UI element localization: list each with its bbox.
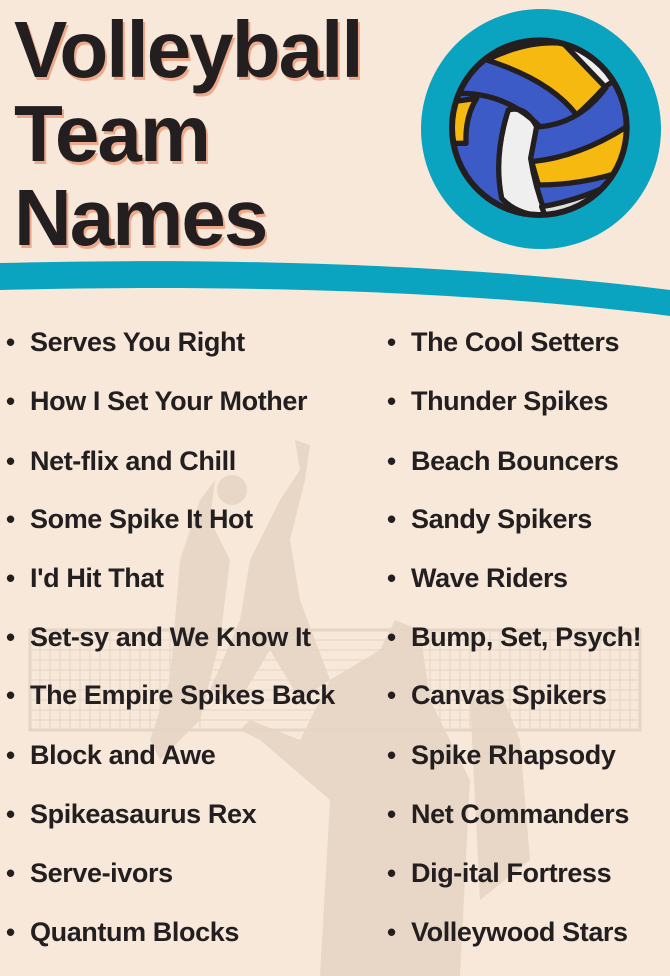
list: right column: Net Commanders	[411, 799, 629, 829]
list: right column: Canvas Spikers	[411, 680, 607, 710]
list: right column: Thunder Spikes	[411, 386, 608, 416]
list: left column: Net-flix and Chill	[30, 446, 236, 476]
list: right column: Bump, Set, Psych!	[411, 622, 641, 652]
list: left column: Serve-ivors	[30, 858, 173, 888]
list: right column: Volleywood Stars	[411, 917, 628, 947]
title: Names	[14, 173, 266, 262]
list: left column: How I Set Your Mother	[30, 386, 307, 416]
list: left column: Quantum Blocks	[30, 917, 239, 947]
list: right column	[388, 327, 641, 947]
title: Volleyball	[14, 5, 362, 94]
list: left column: Serves You Right	[30, 327, 245, 357]
title: Team	[14, 89, 209, 178]
wave band	[0, 261, 670, 316]
list: left column: Set-sy and We Know It	[30, 622, 311, 652]
list: left column	[6, 327, 336, 947]
list: left column: The Empire Spikes Back	[30, 680, 335, 710]
list: right column: The Cool Setters	[411, 327, 619, 357]
title	[14, 5, 362, 262]
list: left column: Spikeasaurus Rex	[30, 799, 256, 829]
list: right column: Sandy Spikers	[411, 504, 592, 534]
list: right column: Wave Riders	[411, 563, 568, 593]
list: right column: Beach Bouncers	[411, 446, 618, 476]
list: right column: Dig-ital Fortress	[411, 858, 611, 888]
list: left column: Some Spike It Hot	[30, 504, 253, 534]
list: right column: Spike Rhapsody	[411, 740, 615, 770]
list: left column: I'd Hit That	[30, 563, 164, 593]
list: left column: Block and Awe	[30, 740, 215, 770]
icon: volleyball in teal circle	[421, 9, 661, 249]
